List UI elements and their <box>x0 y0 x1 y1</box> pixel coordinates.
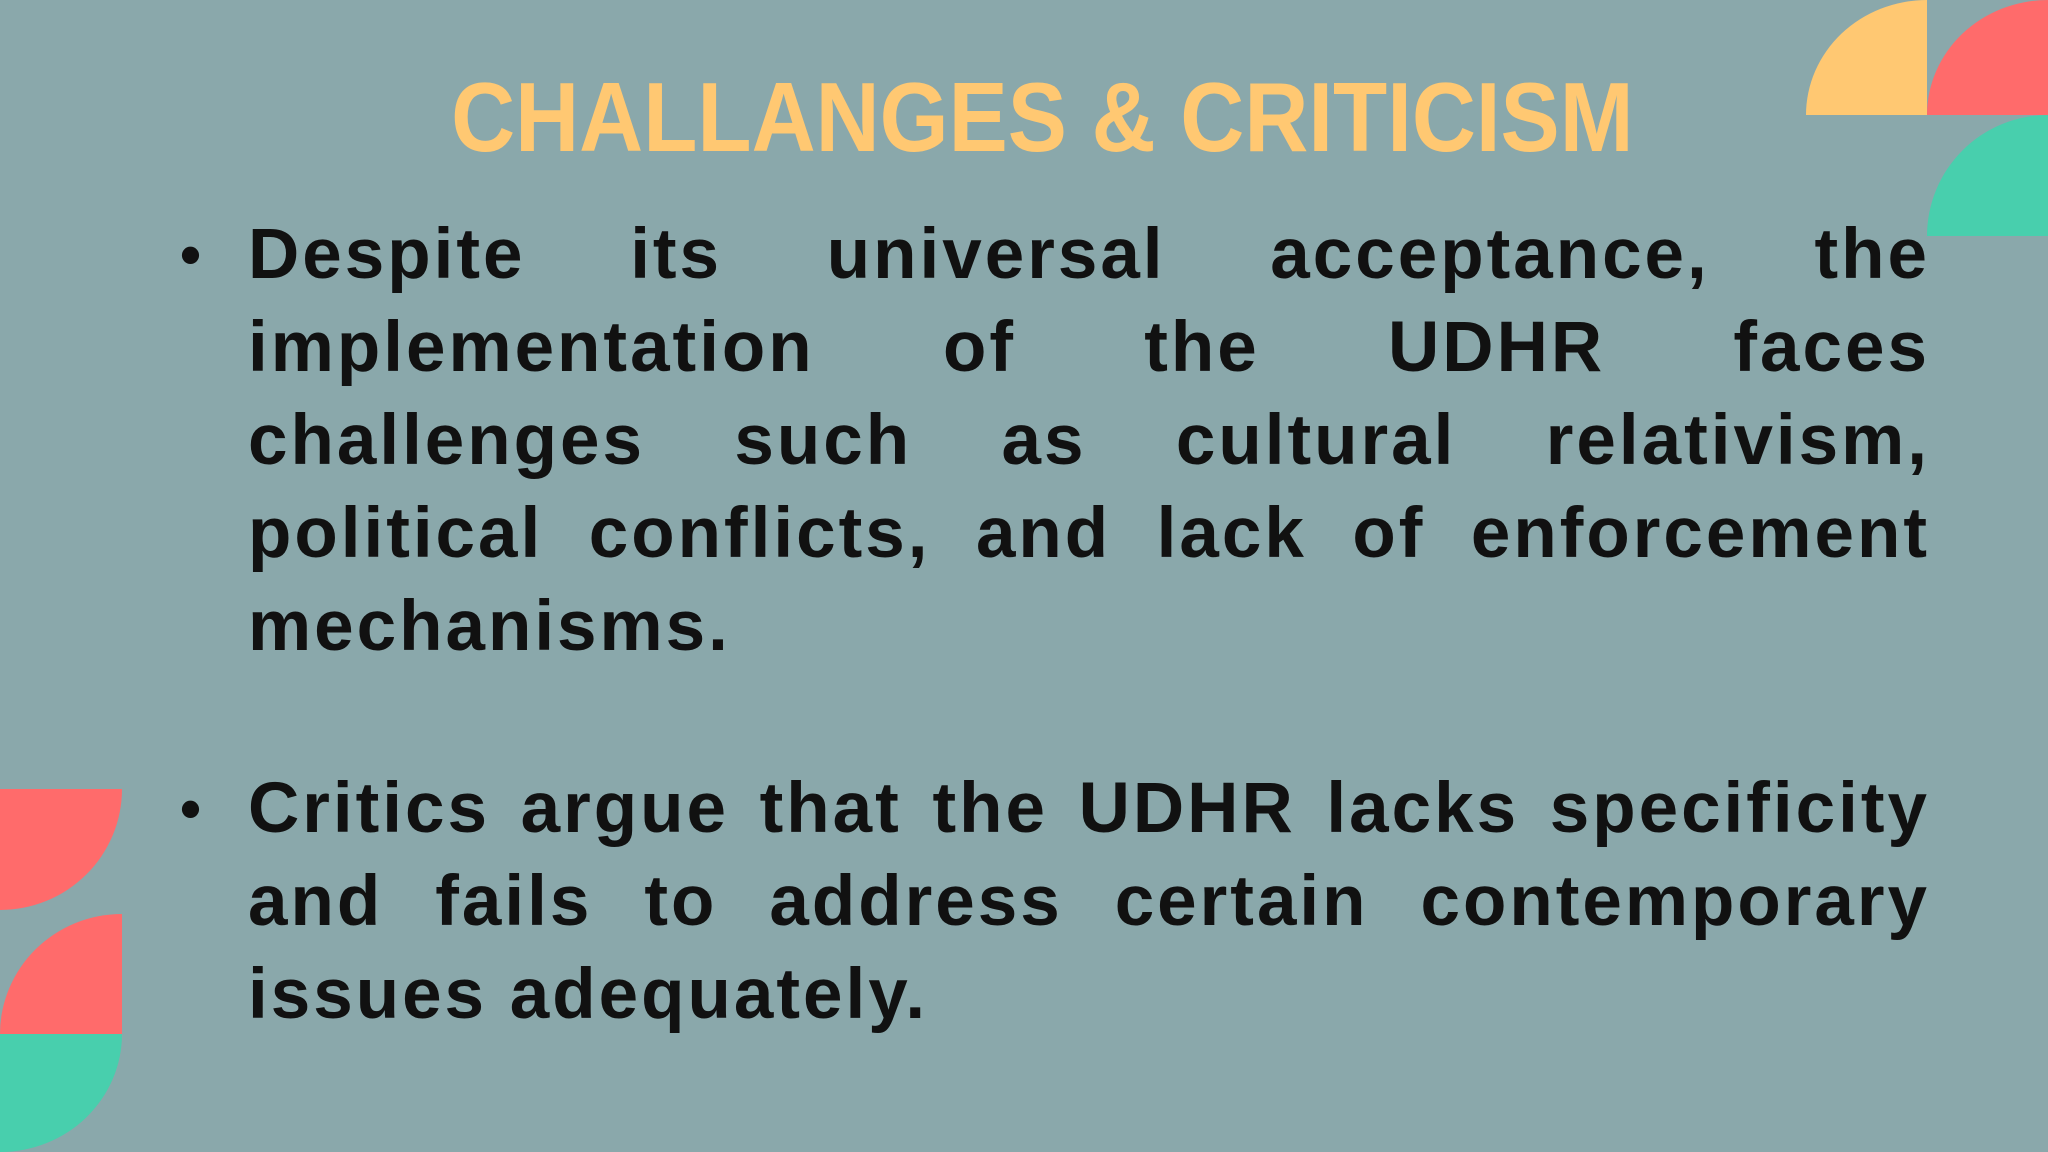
bullet 1 text: Despite its universal acceptance, the <box>248 215 1930 294</box>
decoration: green quarter top right <box>1927 115 2048 236</box>
decoration: red quarter bottom left 1 <box>0 789 122 910</box>
bullet 2 text: issues adequately. <box>248 955 928 1034</box>
bullet 2 text: and fails to address certain contemporary <box>248 862 1930 941</box>
bullet 1 text: challenges such as cultural relativism, <box>248 401 1930 480</box>
decoration: yellow quarter <box>1806 0 1927 115</box>
bullet 1 text: implementation of the UDHR faces <box>248 308 1930 387</box>
text: • <box>180 221 204 288</box>
bullet 1 text: political conflicts, and lack of enforcement <box>248 494 1930 573</box>
text: • <box>180 775 204 842</box>
bullet 1 text: mechanisms. <box>248 587 731 666</box>
decoration: red quarter bottom left 2 <box>0 914 122 1034</box>
title: CHALLANGES & CRITICISM <box>451 62 1633 172</box>
decoration: red quarter top right <box>1927 0 2048 115</box>
decoration: green quarter bottom left <box>0 1034 122 1152</box>
bullet 2 text <box>180 769 1930 1034</box>
bullet 1 text <box>180 215 1930 666</box>
bullet 2 text: Critics argue that the UDHR lacks specificity <box>248 769 1930 848</box>
